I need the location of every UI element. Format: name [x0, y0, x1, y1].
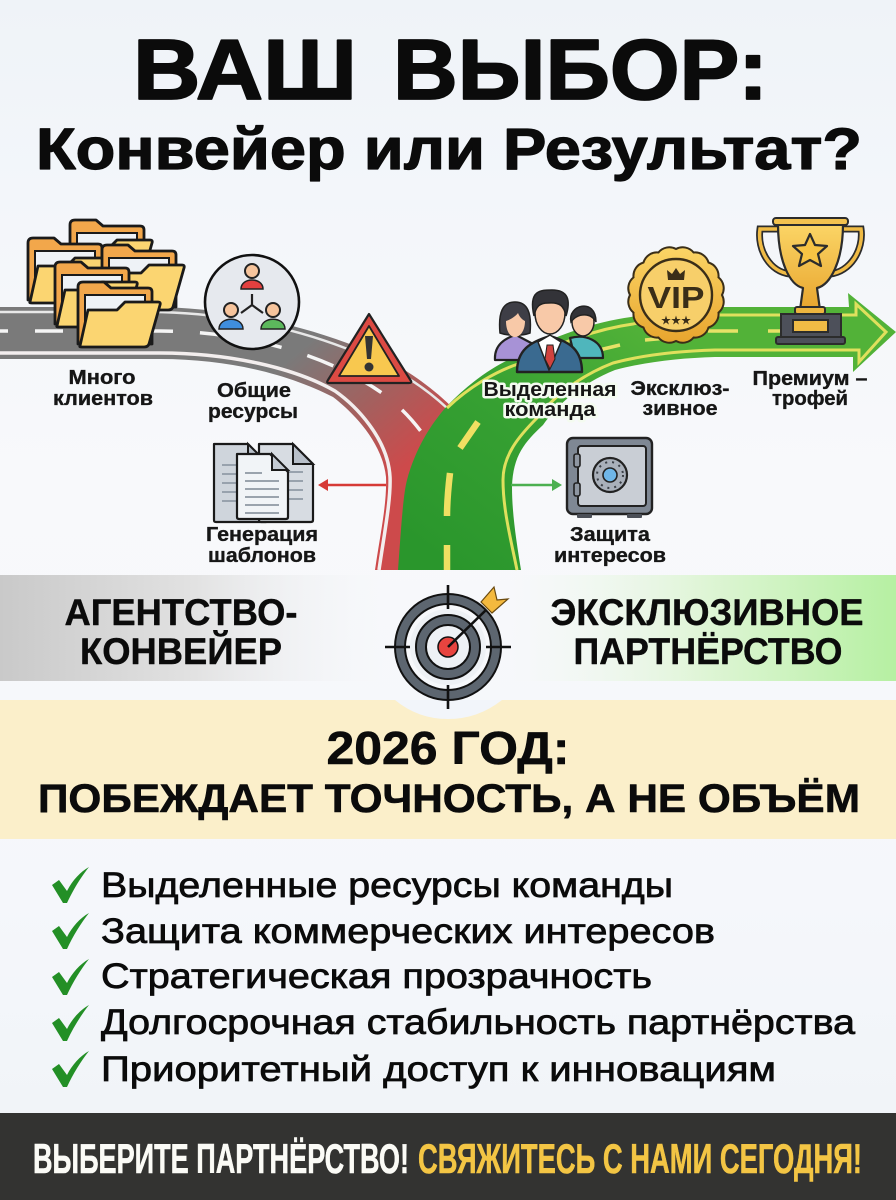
label: premium trophy: трофей — [772, 388, 848, 410]
panel: conclusion band: ПОБЕЖДАЕТ ТОЧНОСТЬ, А НЕ ОБЪЁМ — [38, 777, 860, 821]
label: shared resources — [208, 380, 298, 423]
icon: VIP badge: VIP — [648, 280, 704, 315]
icon: dedicated team — [495, 290, 603, 372]
label: protection of interests: Защита — [570, 524, 651, 546]
panel: conveyor agency band: КОНВЕЙЕР — [80, 630, 282, 672]
label: premium trophy: Премиум – — [752, 368, 868, 390]
arrow: to templates — [318, 479, 386, 491]
checklist — [52, 866, 856, 1089]
panel: exclusive partnership band: ПАРТНЁРСТВО — [574, 631, 842, 672]
panel: conclusion band: 2026 ГОД: — [326, 722, 570, 774]
label: shared resources: Общие — [217, 380, 291, 402]
panel: exclusive partnership band — [510, 575, 896, 681]
title — [36, 23, 862, 182]
label: template generation: шаблонов — [208, 545, 316, 567]
panel: call to action bar: ВЫБЕРИТЕ ПАРТНЁРСТВО! — [33, 1135, 409, 1182]
panel: conclusion band — [0, 700, 896, 839]
label: premium trophy — [752, 368, 868, 410]
label: exclusive: Эксклюз- — [630, 378, 730, 400]
panel: conveyor agency band: АГЕНТСТВО- — [64, 592, 298, 633]
label: dedicated team: команда — [504, 399, 596, 421]
item: dedicated team resources: Выделенные ресурсы команды — [101, 866, 673, 905]
title: ВЫБОР: — [393, 23, 768, 118]
label: protection of interests: интересов — [554, 545, 666, 567]
label: dedicated team: Выделенная — [484, 379, 616, 401]
label: protection of interests — [554, 524, 666, 567]
item: priority access: Приоритетный доступ к инновациям — [101, 1050, 776, 1089]
item: long-term stability: Долгосрочная стабильность партнёрства — [101, 1003, 856, 1042]
item: protecting commercial interests: Защита коммерческих интересов — [101, 912, 715, 951]
panel: call to action bar — [0, 1113, 896, 1200]
title: ВАШ — [133, 23, 357, 118]
label: exclusive: зивное — [642, 398, 718, 420]
label: shared resources: ресурсы — [208, 401, 298, 423]
label: exclusive — [630, 378, 730, 420]
icon: shared resources — [205, 255, 299, 349]
label: many clients: клиентов — [53, 388, 153, 410]
icon: target with arrow — [385, 585, 511, 709]
panel: exclusive partnership band: ЭКСКЛЮЗИВНОЕ — [550, 592, 864, 633]
label: dedicated team — [484, 379, 616, 421]
label: many clients — [53, 367, 153, 410]
green road arrow — [398, 293, 896, 570]
title: Конвейер или Результат? — [36, 117, 862, 182]
panel: conveyor agency band — [0, 575, 390, 681]
item: strategic transparency: Стратегическая прозрачность — [101, 957, 652, 996]
icon: folders — [28, 220, 184, 347]
icon: VIP badge: ★★★ — [661, 316, 691, 327]
icon: warning triangle — [327, 314, 411, 383]
icon: template documents — [214, 444, 313, 522]
icon: trophy — [760, 218, 861, 344]
icon: safe — [567, 438, 652, 518]
icon: VIP badge — [628, 247, 724, 343]
arrow: to safe — [511, 479, 562, 491]
gray road turning red — [0, 307, 455, 570]
label: template generation — [206, 524, 318, 567]
label: template generation: Генерация — [206, 524, 318, 546]
label: many clients: Много — [68, 367, 136, 389]
